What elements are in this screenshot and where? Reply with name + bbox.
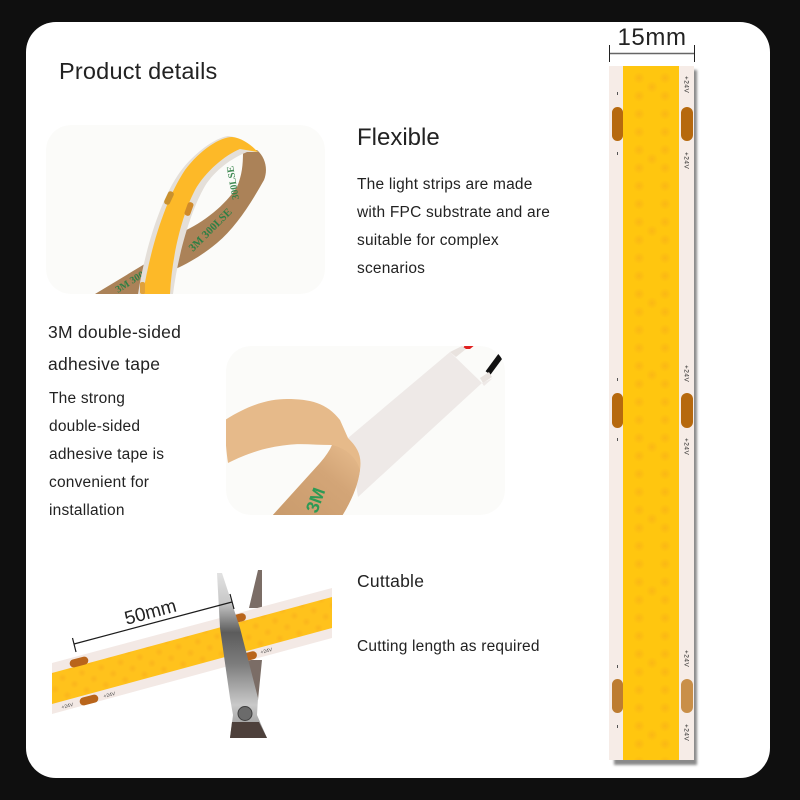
brown backing loop — [225, 399, 360, 516]
voltage labels: +24V — [682, 724, 690, 742]
strip yellow — [52, 597, 332, 704]
minus marks — [616, 92, 618, 728]
dimension: 50mm: 50mm — [122, 596, 179, 630]
text: flexible description — [356, 176, 550, 277]
text: adhesive description: installation — [49, 502, 125, 519]
text: adhesive description — [49, 390, 164, 519]
photo: cuttable strip with scissors — [52, 570, 332, 738]
text: adhesive description: adhesive tape is — [49, 446, 164, 463]
scissor handle base — [230, 722, 267, 738]
strip base — [52, 588, 332, 714]
photo: cuttable strip with scissors: +24V — [103, 691, 117, 700]
strip white edge — [138, 136, 258, 294]
front scissor blade — [217, 573, 267, 738]
voltage labels: +24V — [682, 438, 690, 456]
panel: adhesive tape photo — [225, 344, 505, 516]
strip shadow — [614, 70, 697, 765]
solder pads bottom — [612, 679, 623, 713]
voltage labels — [682, 76, 690, 742]
green print: 3M — [302, 485, 329, 515]
strip end tabs — [450, 346, 492, 383]
solder pads — [70, 656, 88, 668]
white strip underside — [348, 352, 493, 497]
text: cuttable description: Cutting length as required — [357, 638, 540, 655]
photo: cuttable strip with scissors: +24V — [260, 647, 274, 656]
yellow light — [623, 66, 679, 760]
text: adhesive description: double-sided — [49, 418, 140, 435]
voltage labels: +24V — [682, 365, 690, 383]
voltage labels: +24V — [682, 152, 690, 170]
heading: adhesive tape: adhesive tape — [48, 354, 160, 374]
heading: adhesive tape — [48, 322, 181, 374]
rear scissor blade — [247, 570, 262, 700]
text: adhesive description: The strong — [49, 390, 125, 407]
text: adhesive description: convenient for — [49, 474, 149, 491]
dimension: 15mm: 15mm — [617, 24, 687, 51]
strip base — [609, 66, 694, 760]
strip voltage labels: +24V — [61, 702, 75, 711]
scissor screw — [238, 706, 252, 720]
dimension: 50mm — [72, 594, 234, 652]
title: Product details — [59, 58, 217, 84]
panel: flexible photo: 3M 300 — [114, 269, 147, 296]
long LED strip — [609, 66, 697, 765]
voltage labels: +24V — [682, 650, 690, 668]
panel: flexible photo: 300LSE — [225, 165, 242, 200]
adhesive backing loop — [95, 150, 266, 294]
panel: flexible photo — [95, 136, 266, 294]
voltage labels: +24V — [682, 76, 690, 94]
dimension: 15mm — [610, 24, 694, 62]
solder pads — [164, 191, 174, 205]
solder pads top — [612, 107, 623, 141]
wire ends — [464, 346, 474, 349]
text: flexible description: suitable for complex — [357, 232, 499, 249]
heading: adhesive tape: 3M double-sided — [48, 322, 181, 342]
heading: flexible: Flexible — [357, 124, 440, 151]
heading: cuttable: Cuttable — [357, 571, 424, 591]
text: flexible description: scenarios — [357, 260, 425, 277]
text: flexible description: with FPC substrate and are — [356, 204, 550, 221]
strip yellow light — [143, 137, 258, 294]
text: flexible description: The light strips are made — [357, 176, 533, 193]
solder pads middle — [612, 393, 623, 428]
tape print: 3M 300LSE — [187, 206, 235, 254]
